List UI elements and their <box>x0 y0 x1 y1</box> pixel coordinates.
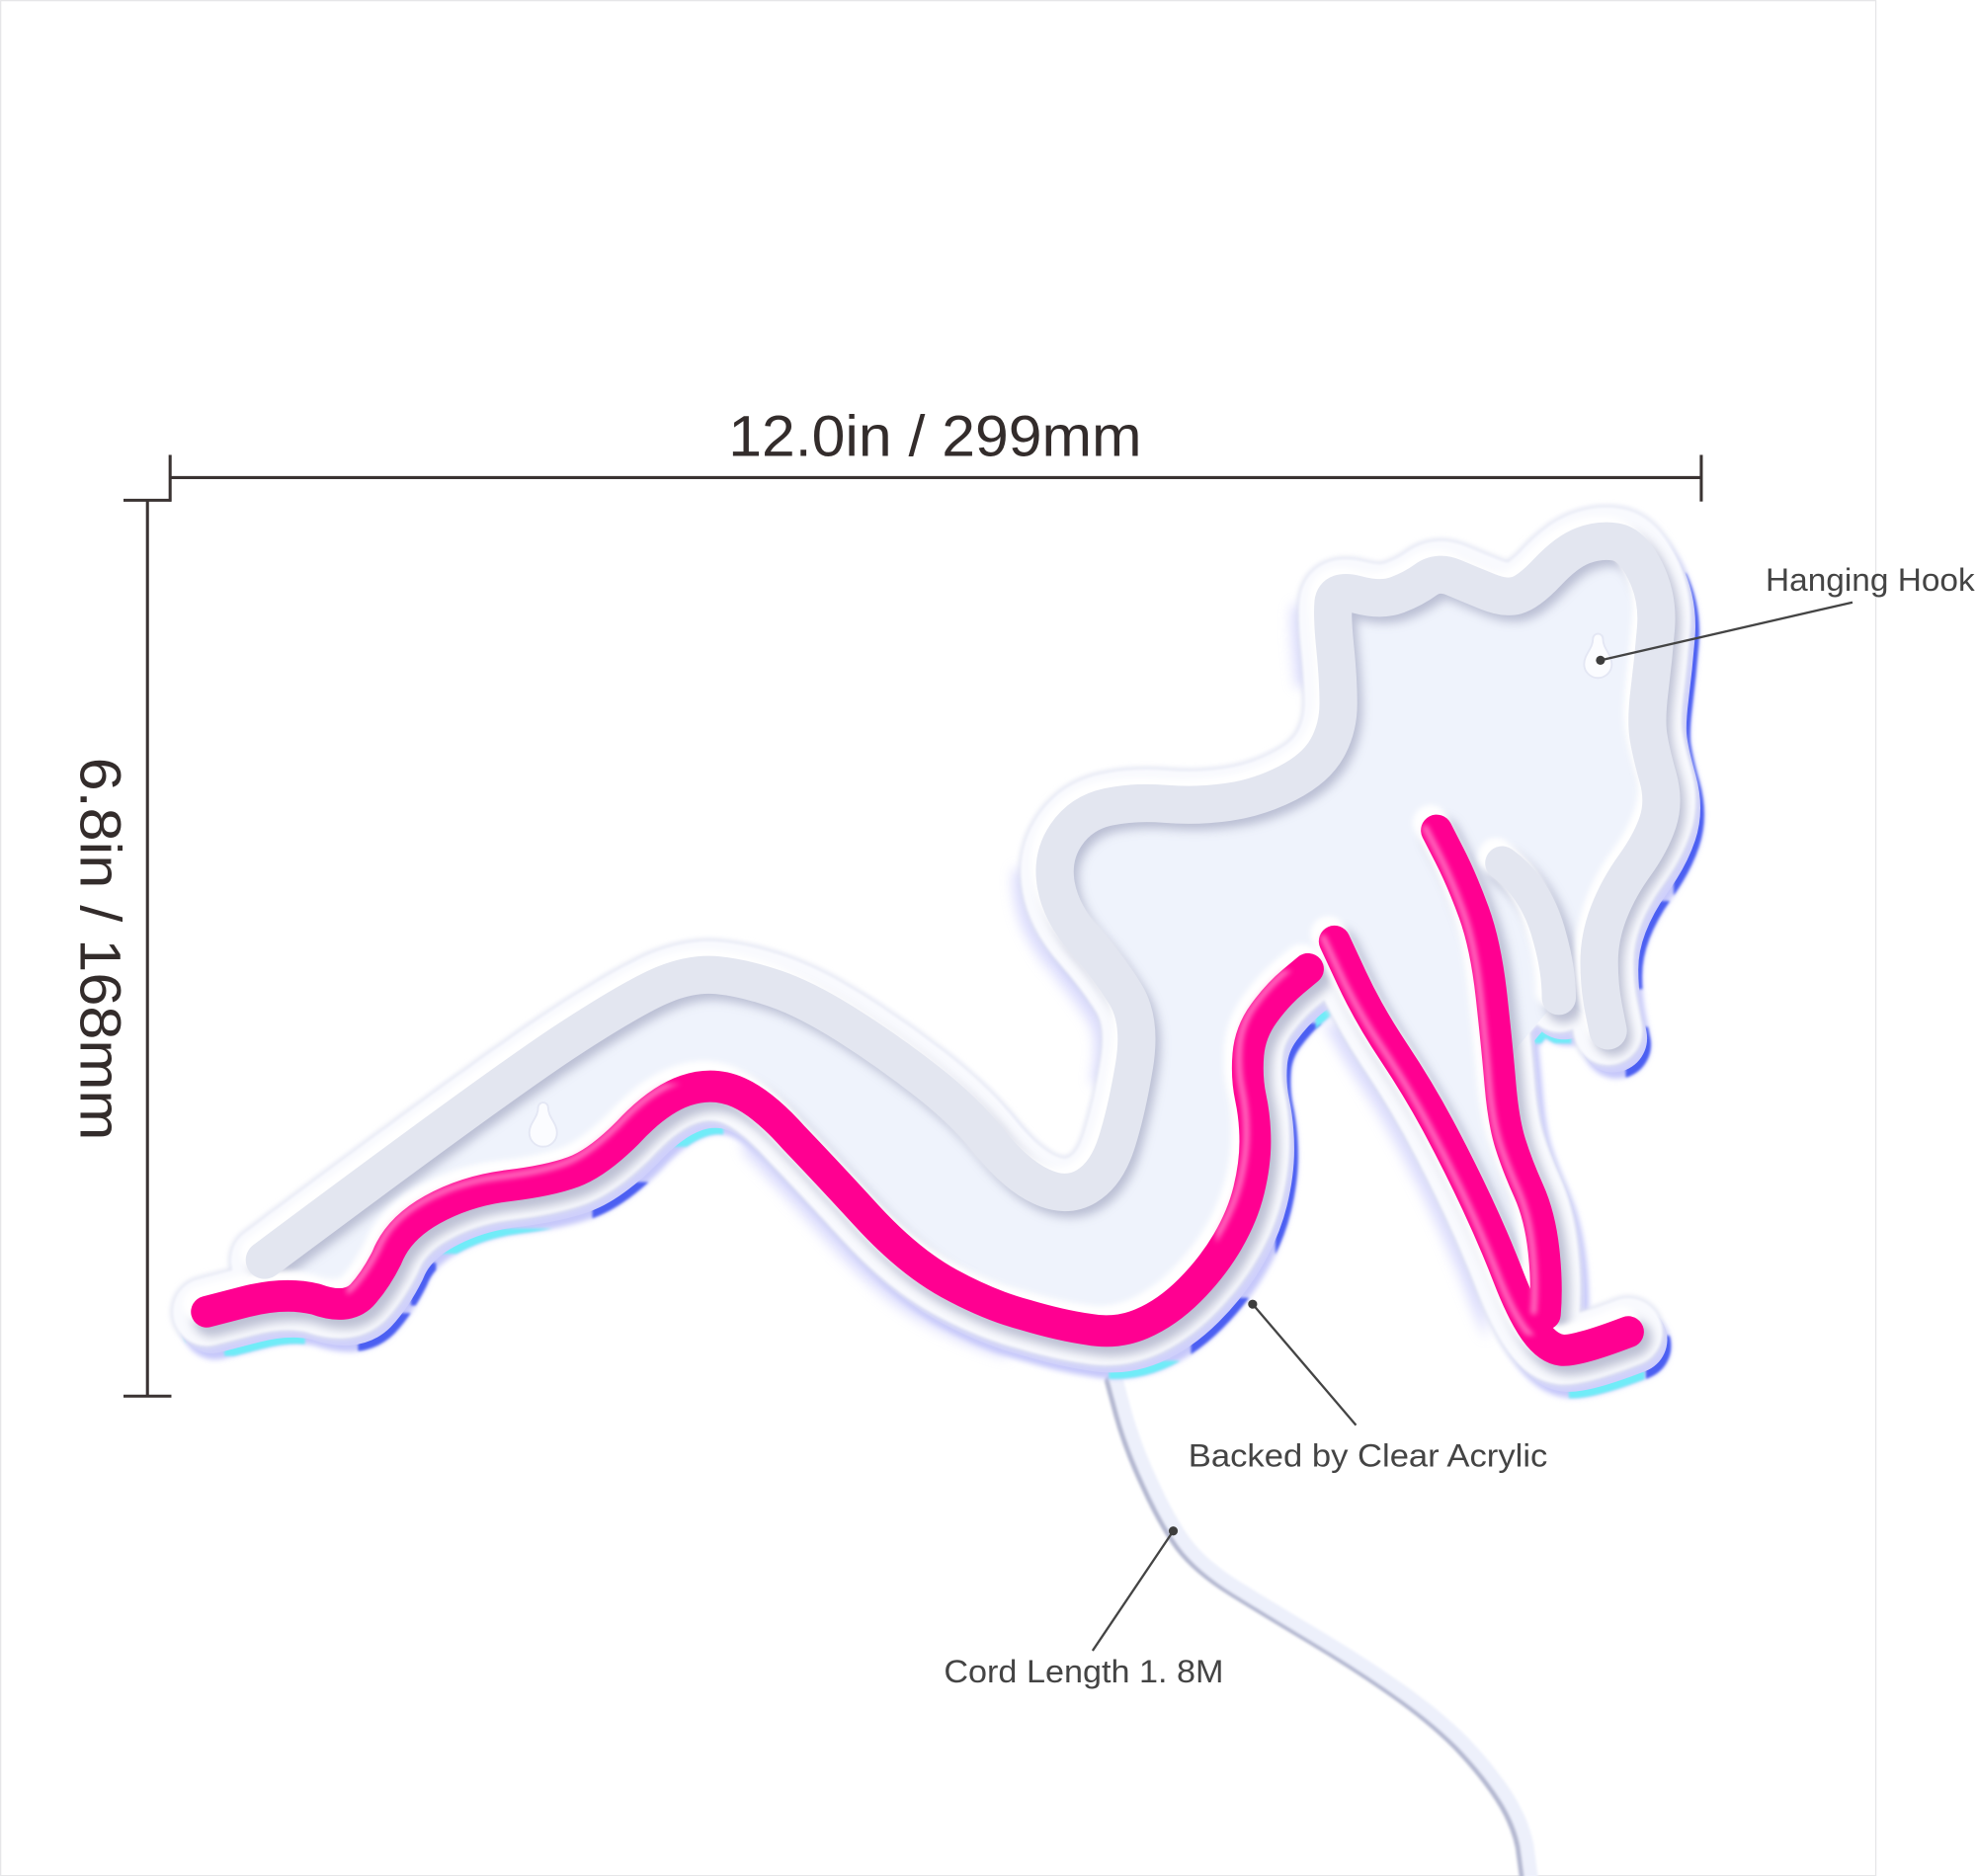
icon: hanging hole right <box>1584 634 1611 678</box>
width dimension: 12.0in / 299mm <box>728 405 1142 469</box>
tube shadows and highlights <box>201 533 1667 1356</box>
height dimension: 6.8in / 168mm <box>68 758 132 1140</box>
clear acrylic backing <box>206 541 1661 1350</box>
callout: hanging hook <box>1596 562 1975 665</box>
callout: clear acrylic: Backed by Clear Acrylic <box>1189 1438 1547 1474</box>
iridescent acrylic edge <box>200 548 1670 1364</box>
icon: hanging hole left <box>530 1102 557 1147</box>
power cord <box>1111 1379 1531 1876</box>
callout: clear acrylic <box>1189 1300 1547 1474</box>
lit pink neon tube <box>198 828 1628 1350</box>
callout: cord length <box>944 1526 1224 1689</box>
callout: cord length: Cord Length 1. 8M <box>944 1654 1224 1689</box>
callout: hanging hook: Hanging Hook <box>1766 562 1975 598</box>
neon sign <box>198 533 1670 1364</box>
unlit gray neon tube: outline <box>265 541 1661 1261</box>
